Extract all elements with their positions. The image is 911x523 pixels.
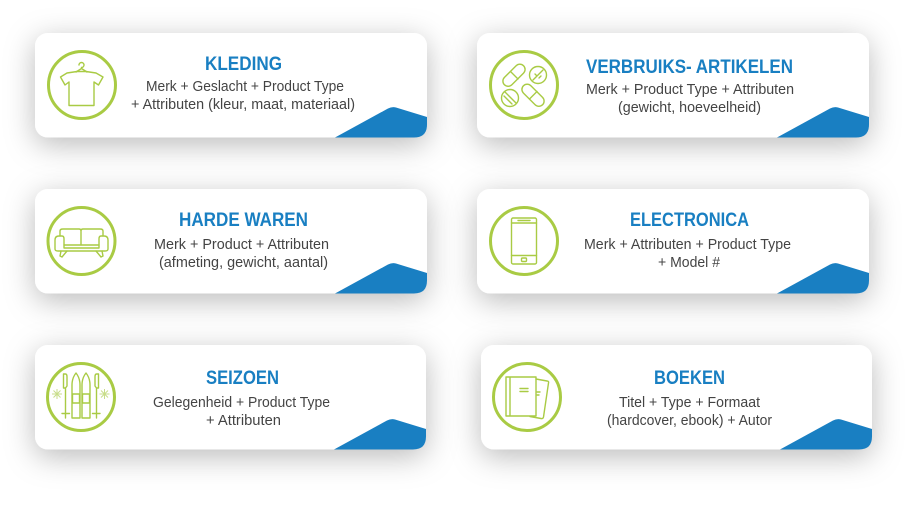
panel: boeken <box>481 345 872 450</box>
heading: kleding: KLEDING <box>205 53 282 75</box>
text: electronica formula: Merk + Attributen + Product Type <box>584 237 791 253</box>
corner accent: seizoen <box>334 419 426 450</box>
text: verbruiksartikelen formula: Merk + Product Type + Attributen <box>586 82 794 98</box>
text: boeken formula <box>607 395 772 429</box>
heading: electronica: ELECTRONICA <box>630 209 749 231</box>
text: kleding formula <box>131 79 355 113</box>
text: verbruiksartikelen formula <box>586 82 794 116</box>
icon: books <box>494 364 560 430</box>
corner accent: harde waren <box>335 263 427 294</box>
text: harde waren formula <box>154 237 329 271</box>
text: kleding formula: Merk + Geslacht + Product Type <box>146 79 344 95</box>
panel: electronica <box>477 189 869 294</box>
icon: sofa <box>48 208 115 274</box>
text: verbruiksartikelen formula: (gewicht, hoeveelheid) <box>618 100 761 116</box>
heading: boeken: BOEKEN <box>654 367 725 389</box>
text: harde waren formula: Merk + Product + Attributen <box>154 237 329 253</box>
text: harde waren formula: (afmeting, gewicht, aantal) <box>159 255 328 271</box>
text: seizoen formula: Gelegenheid + Product Type <box>153 395 330 411</box>
corner accent: boeken <box>780 419 872 450</box>
text: electronica formula <box>584 237 791 271</box>
icon: t-shirt <box>48 52 116 118</box>
heading: verbruiksartikelen: VERBRUIKS- ARTIKELEN <box>586 56 793 78</box>
corner accent: kleding <box>335 107 427 138</box>
text: electronica formula: + Model # <box>658 255 720 271</box>
icon: skis and poles <box>48 364 114 430</box>
panel: verbruiksartikelen <box>477 33 869 138</box>
text: seizoen formula: + Attributen <box>206 413 281 429</box>
panel: harde waren <box>35 189 427 294</box>
text: kleding formula: + Attributen (kleur, maat, materiaal) <box>131 97 355 113</box>
text: boeken formula: Titel + Type + Formaat <box>619 395 760 411</box>
corner accent: verbruiksartikelen <box>777 107 869 138</box>
heading: harde waren: HARDE WAREN <box>179 209 308 231</box>
heading: seizoen: SEIZOEN <box>206 367 279 389</box>
panel: seizoen <box>35 345 426 450</box>
panel: kleding <box>35 33 427 138</box>
icon: pills <box>490 52 558 118</box>
corner accent: electronica <box>777 263 869 294</box>
icon: smartphone <box>490 208 558 274</box>
text: boeken formula: (hardcover, ebook) + Autor <box>607 413 772 429</box>
text: seizoen formula <box>153 395 330 429</box>
